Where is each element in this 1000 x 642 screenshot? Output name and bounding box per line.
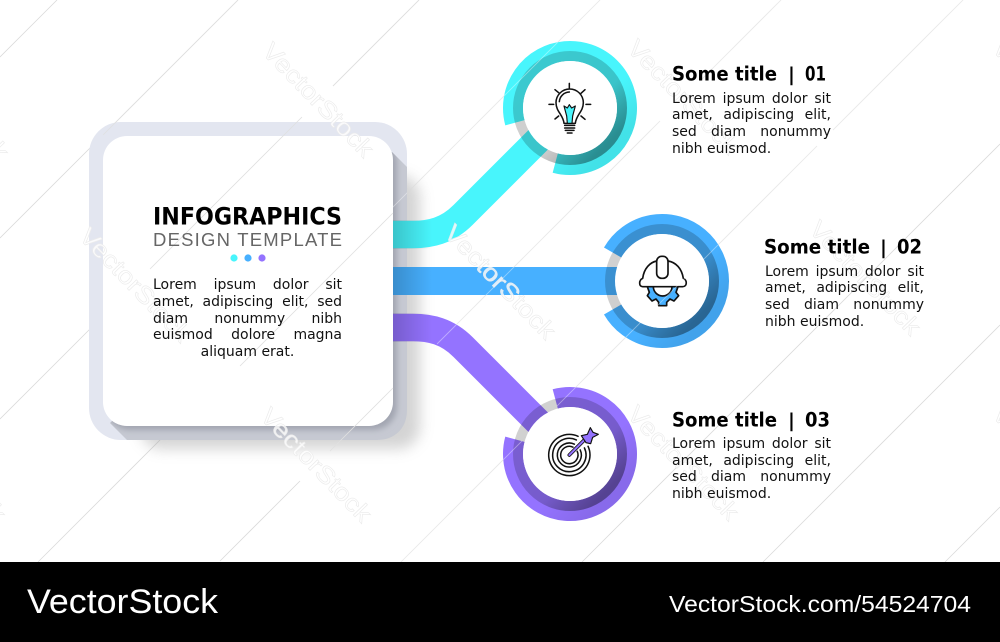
watermark stamps: VectorStock: [255, 403, 378, 529]
text block: main card paragraph: amet, adipiscing elit, sed: [153, 294, 342, 310]
title 01: |: [788, 64, 795, 86]
footer image id: VectorStock.com/54524704: [669, 591, 971, 617]
watermark stamps: VectorStock: [74, 223, 197, 349]
connector: cyan to circle 1: [393, 108, 570, 248]
connector: purple to circle 3: [393, 314, 570, 454]
title 02: Some title: [764, 236, 870, 258]
light watermark lines over shapes: [240, 0, 963, 562]
text block: item 01: nibh euismod.: [672, 141, 771, 157]
text block: item 01: amet, adipiscing elit,: [672, 107, 831, 123]
subheading: design template: DESIGN TEMPLATE: [153, 229, 342, 250]
extruded shadow: [110, 152, 407, 440]
text block: item 03: nibh euismod.: [672, 486, 771, 502]
circle 3 with target: [513, 397, 627, 511]
text block: item 01: Lorem ipsum dolor sit: [672, 91, 831, 107]
text block: item 02: amet, adipiscing elit,: [765, 280, 924, 296]
watermark stamps: VectorStock: [622, 401, 745, 527]
text block: item 03: sed diam nonummy: [672, 469, 831, 485]
text block: item 02: [765, 264, 924, 330]
text block: item 03: Lorem ipsum dolor sit: [672, 436, 831, 452]
text block: item 02: Lorem ipsum dolor sit: [765, 264, 924, 280]
white card: [103, 136, 393, 426]
title 03: 03: [805, 408, 830, 432]
watermark stamps: VectorStock: [257, 38, 380, 164]
circle 1 with lightbulb: [513, 51, 627, 165]
icon: helmet and gear: [640, 256, 686, 306]
title 02: |: [880, 236, 887, 258]
watermark stamps: VectorStock: [439, 220, 562, 346]
outer frame: [89, 122, 407, 440]
watermark stamps: [0, 35, 1000, 529]
title 02: 02: [897, 236, 922, 258]
panel: main square card: [89, 122, 420, 450]
heading: infographics: INFOGRAPHICS: [153, 202, 342, 230]
card inner watermark lines: [103, 0, 419, 451]
watermark stamps: VectorStock: [804, 216, 927, 342]
three accent dots: [230, 254, 266, 262]
soft drop shadow: [140, 175, 420, 449]
text block: item 01: sed diam nonummy: [672, 124, 831, 140]
icon: lightbulb: [549, 83, 591, 133]
footer bar: [0, 562, 1000, 642]
title 01: Some title: [672, 62, 777, 86]
text block: main card paragraph: aliquam erat.: [201, 344, 294, 360]
text block: item 03: [672, 436, 831, 502]
title 03: |: [788, 410, 795, 432]
icon: target with dart: [549, 428, 598, 476]
footer logo text: VectorStock: [27, 583, 219, 621]
circle 2 with helmet: [610, 224, 719, 338]
title 01: 01: [805, 62, 826, 86]
text block: item 03: amet, adipiscing elit,: [672, 453, 831, 469]
text block: item 02: nibh euismod.: [765, 314, 864, 330]
text block: main card paragraph: diam nonummy nibh: [153, 311, 342, 327]
watermark stamps: VectorStock: [622, 35, 745, 161]
text block: item 01: [672, 91, 831, 157]
title 03: Some title: [672, 408, 777, 432]
connector: blue to circle 2: [393, 267, 662, 295]
text block: main card paragraph: Lorem ipsum dolor sit: [153, 277, 342, 293]
text block: item 02: sed diam nonummy: [765, 297, 924, 313]
text block: main card paragraph: [153, 277, 342, 360]
text block: main card paragraph: euismod dolore magna: [153, 327, 342, 343]
